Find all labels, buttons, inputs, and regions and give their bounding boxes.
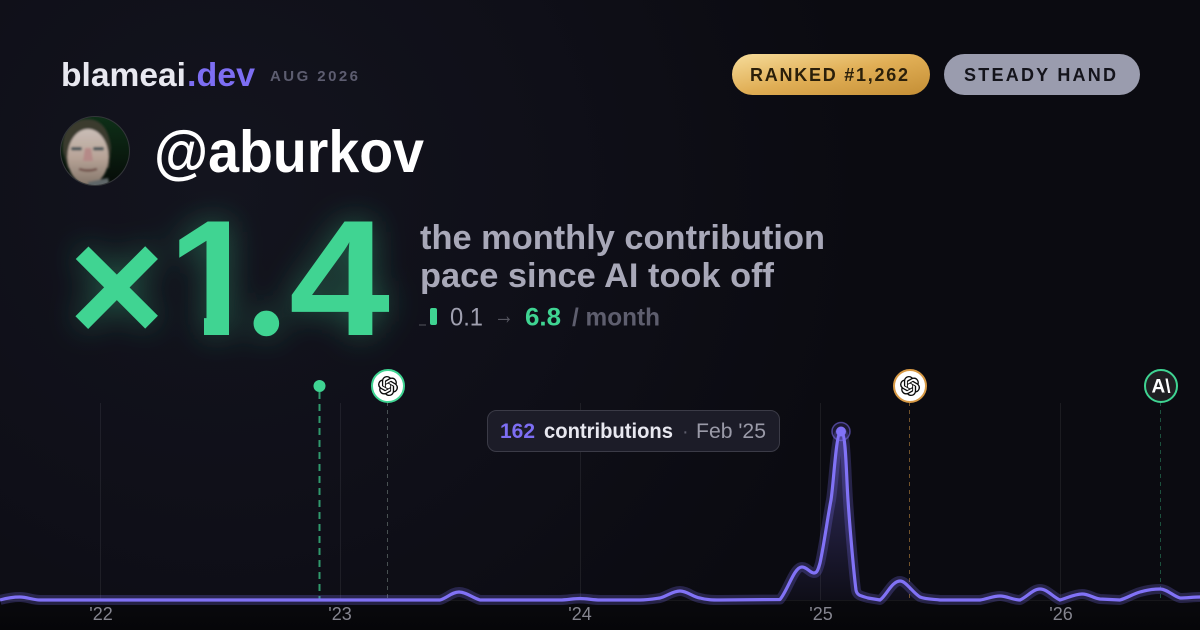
marker: Anthropic release: A\ (1152, 376, 1171, 398)
marker: OpenAI release (372, 370, 404, 600)
hero multiplier: × (68, 194, 165, 378)
pace stats: 6.8 (525, 304, 561, 332)
contribution line glow (0, 432, 1200, 600)
year gridlines (0, 403, 1200, 600)
pace stats: → (494, 302, 514, 330)
pace stats (419, 302, 660, 332)
year axis labels (89, 604, 1073, 624)
year axis labels: '26 (1049, 604, 1073, 624)
badge: persona (944, 54, 1140, 95)
marker: Anthropic release (1145, 370, 1177, 598)
year axis labels: '24 (568, 604, 592, 624)
year axis labels: '25 (809, 604, 833, 624)
subtitle: pace since AI took off (420, 257, 775, 295)
pace stats: / month (572, 304, 660, 332)
contribution area fill (780, 432, 933, 600)
contribution line (0, 432, 1200, 600)
avatar photo (60, 116, 130, 188)
pace stats: 0.1 (450, 304, 483, 332)
peak tooltip: · (682, 421, 689, 443)
brand wordmark (61, 56, 256, 93)
date label: AUG 2026 (270, 68, 358, 85)
marker: AI take-off (314, 380, 326, 600)
badge: rank (732, 54, 930, 95)
year axis labels: '22 (89, 604, 113, 624)
year axis labels: '23 (328, 604, 352, 624)
peak tooltip: 162 (500, 420, 535, 443)
marker: OpenAI release 2 (894, 370, 926, 600)
peak tooltip: contributions (544, 420, 673, 443)
hero multiplier: 4 (289, 186, 390, 370)
hero multiplier: . (247, 194, 286, 369)
peak tooltip (488, 410, 780, 452)
username: @aburkov (154, 119, 424, 185)
mini bar sparkline (419, 308, 437, 326)
badge: persona: STEADY HAND (964, 65, 1116, 85)
hero multiplier (69, 207, 400, 348)
hero multiplier: 1 (168, 186, 260, 370)
badge: rank: RANKED #1,262 (750, 65, 908, 85)
brand wordmark: .dev (187, 56, 256, 93)
contribution chart (0, 370, 1200, 624)
peak tooltip: Feb '25 (696, 420, 766, 443)
brand wordmark: blameai (61, 56, 186, 93)
subtitle (420, 219, 825, 295)
peak point (832, 422, 850, 440)
subtitle: the monthly contribution (420, 219, 825, 257)
